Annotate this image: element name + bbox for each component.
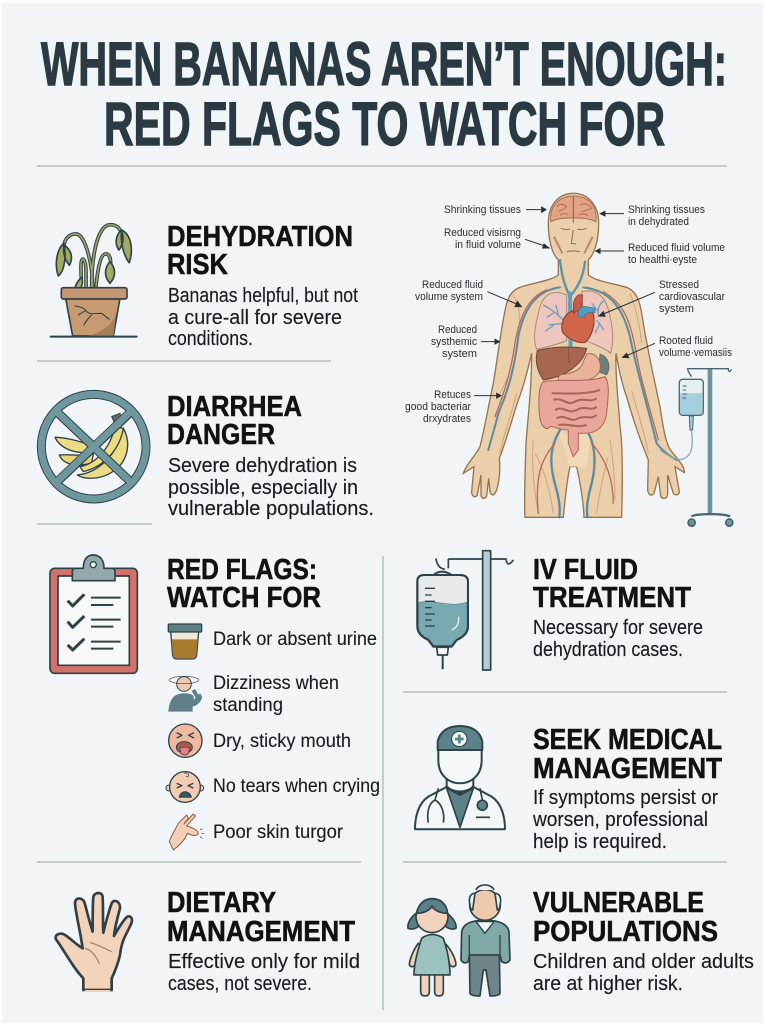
text: dry mouth: Dry, sticky mouth: [213, 731, 351, 752]
label: stressed cardiovascular: system: [659, 303, 694, 315]
heading: seek medical management: [533, 724, 722, 785]
icon: open hand: [56, 893, 132, 991]
icon: urine cup: [168, 624, 202, 659]
intestines: [539, 377, 608, 457]
heading: dehydration risk: DEHYDRATION: [167, 221, 353, 253]
text: dietary body: Effective only for mild: [168, 950, 360, 973]
text: diarrhea danger body: possible, especially in: [168, 476, 358, 499]
label: reduced systemic: Reduced: [438, 324, 477, 336]
title: [41, 30, 727, 158]
icon: crying baby: [166, 772, 204, 802]
label: reduced systemic: system: [442, 348, 477, 360]
icon: iv bag: [417, 551, 513, 670]
liver: [536, 347, 587, 380]
text: dark urine: Dark or absent urine: [213, 629, 377, 650]
icon: wilted plant: [51, 225, 137, 337]
label: reduced fluid volume right: [628, 242, 725, 266]
text: dehydration risk body: [168, 284, 358, 350]
heading: seek medical management: MANAGEMENT: [533, 753, 722, 785]
label: reduced fluid volume right: to healthi·eyste: [628, 254, 697, 266]
text: diarrhea danger body: vulnerable populations.: [168, 497, 374, 520]
text: poor turgor: Poor skin turgor: [213, 822, 344, 843]
text: vulnerable body: [533, 950, 754, 995]
stomach: [558, 354, 600, 383]
label: reduced vision: Reduced visisrng: [444, 227, 521, 239]
iv stand: [703, 368, 717, 515]
label: reduced fluid volume system: Reduced fluid: [422, 279, 483, 291]
label: reduces good bacteria: Retuces: [434, 389, 471, 401]
label: reduced systemic: [431, 324, 477, 360]
body silhouette: [463, 193, 684, 517]
text: dizziness: standing: [213, 695, 283, 716]
text: seek medical body: worsen, professional: [532, 808, 708, 831]
heading: dietary management: DIETARY: [167, 887, 276, 919]
text: iv fluid body: Necessary for severe: [533, 616, 703, 639]
heading: diarrhea danger: DIARRHEA: [167, 391, 302, 423]
icon: doctor: [415, 726, 505, 829]
text: vulnerable body: Children and older adults: [533, 950, 754, 973]
heading: vulnerable populations: VULNERABLE: [533, 887, 704, 919]
label: shrinking tissues right: Shrinking tissues: [628, 204, 705, 216]
label: shrinking tissues right: [628, 204, 705, 228]
label: reduced vision: in fluid volume: [455, 239, 521, 251]
brain: [551, 196, 596, 222]
spleen: [598, 354, 609, 375]
text: dietary body: [168, 950, 360, 995]
icon: dizzy person: [168, 676, 202, 712]
label: stressed cardiovascular: Stressed: [659, 279, 699, 291]
label: reduces good bacteria: [405, 389, 471, 425]
label: shrinking tissues left: Shrinking tissues: [444, 204, 521, 216]
text: seek medical body: help is required.: [533, 830, 667, 853]
text: seek medical body: [532, 786, 718, 853]
text: dizziness: Dizziness when: [213, 673, 339, 694]
heading: red flags: RED FLAGS:: [167, 554, 317, 586]
label: reduces good bacteria: drxydrates: [423, 413, 471, 425]
heading: iv fluid treatment: [533, 554, 691, 614]
heart: [562, 308, 594, 343]
text: seek medical body: If symptoms persist or: [533, 786, 718, 809]
text: diarrhea danger body: [168, 454, 374, 520]
label: rooted fluid: Rooted fluid: [659, 335, 713, 347]
label: reduced systemic: systhemic: [431, 336, 477, 348]
text: vulnerable body: are at higher risk.: [533, 972, 683, 995]
muscle lines: [500, 293, 648, 513]
label: rooted fluid: [659, 335, 732, 359]
text: dehydration risk body: Bananas helpful, but not: [168, 284, 358, 307]
heading: iv fluid treatment: TREATMENT: [533, 582, 691, 614]
text: no tears: No tears when crying: [213, 776, 380, 797]
label: stressed cardiovascular: cardiovascular: [659, 291, 725, 303]
label: reduced fluid volume system: [415, 279, 483, 303]
heading: seek medical management: SEEK MEDICAL: [533, 724, 722, 756]
text: diarrhea danger body: Severe dehydration is: [168, 454, 357, 477]
heading: vulnerable populations: POPULATIONS: [533, 916, 718, 948]
icon: pinching fingers: [169, 814, 204, 850]
icon: clipboard checklist: [50, 555, 137, 673]
label: shrinking tissues right: in dehydrated: [628, 216, 689, 228]
heading: red flags: [167, 554, 321, 614]
label: reduces good bacteria: good bacteriar: [405, 401, 471, 413]
heading: diarrhea danger: DANGER: [167, 419, 275, 451]
heading: red flags: WATCH FOR: [167, 582, 321, 614]
label: rooted fluid: volume·vemasiis: [659, 347, 732, 359]
heading: dehydration risk: RISK: [167, 249, 228, 281]
label: reduced vision: [444, 227, 521, 251]
text: dietary body: cases, not severe.: [168, 972, 312, 995]
icon: crossed-out bananas: [41, 394, 146, 499]
label: reduced fluid volume system: volume system: [415, 291, 483, 303]
text: iv fluid body: dehydration cases.: [533, 638, 683, 661]
icon: dry mouth face: [169, 724, 202, 757]
heading: dietary management: [167, 887, 355, 948]
heading: dietary management: MANAGEMENT: [167, 916, 355, 948]
text: iv fluid body: [533, 616, 703, 661]
text: dehydration risk body: a cure-all for severe: [168, 306, 342, 329]
icon: child and older adult: [408, 885, 510, 996]
heading: iv fluid treatment: IV FLUID: [533, 554, 638, 586]
text: dehydration risk body: conditions.: [168, 327, 253, 350]
lungs: [535, 292, 567, 349]
heading: diarrhea danger: [167, 391, 302, 451]
heading: dehydration risk: [167, 221, 353, 281]
vessels: neck and arms: [488, 260, 677, 517]
illustration: human body with labels: [463, 193, 733, 526]
text: dizziness: [213, 673, 339, 716]
face: [561, 228, 587, 252]
label: reduced fluid volume right: Reduced fluid volume: [628, 242, 725, 254]
heading: vulnerable populations: [533, 887, 718, 948]
callout labels: [474, 207, 655, 398]
label: stressed cardiovascular: [659, 279, 725, 315]
